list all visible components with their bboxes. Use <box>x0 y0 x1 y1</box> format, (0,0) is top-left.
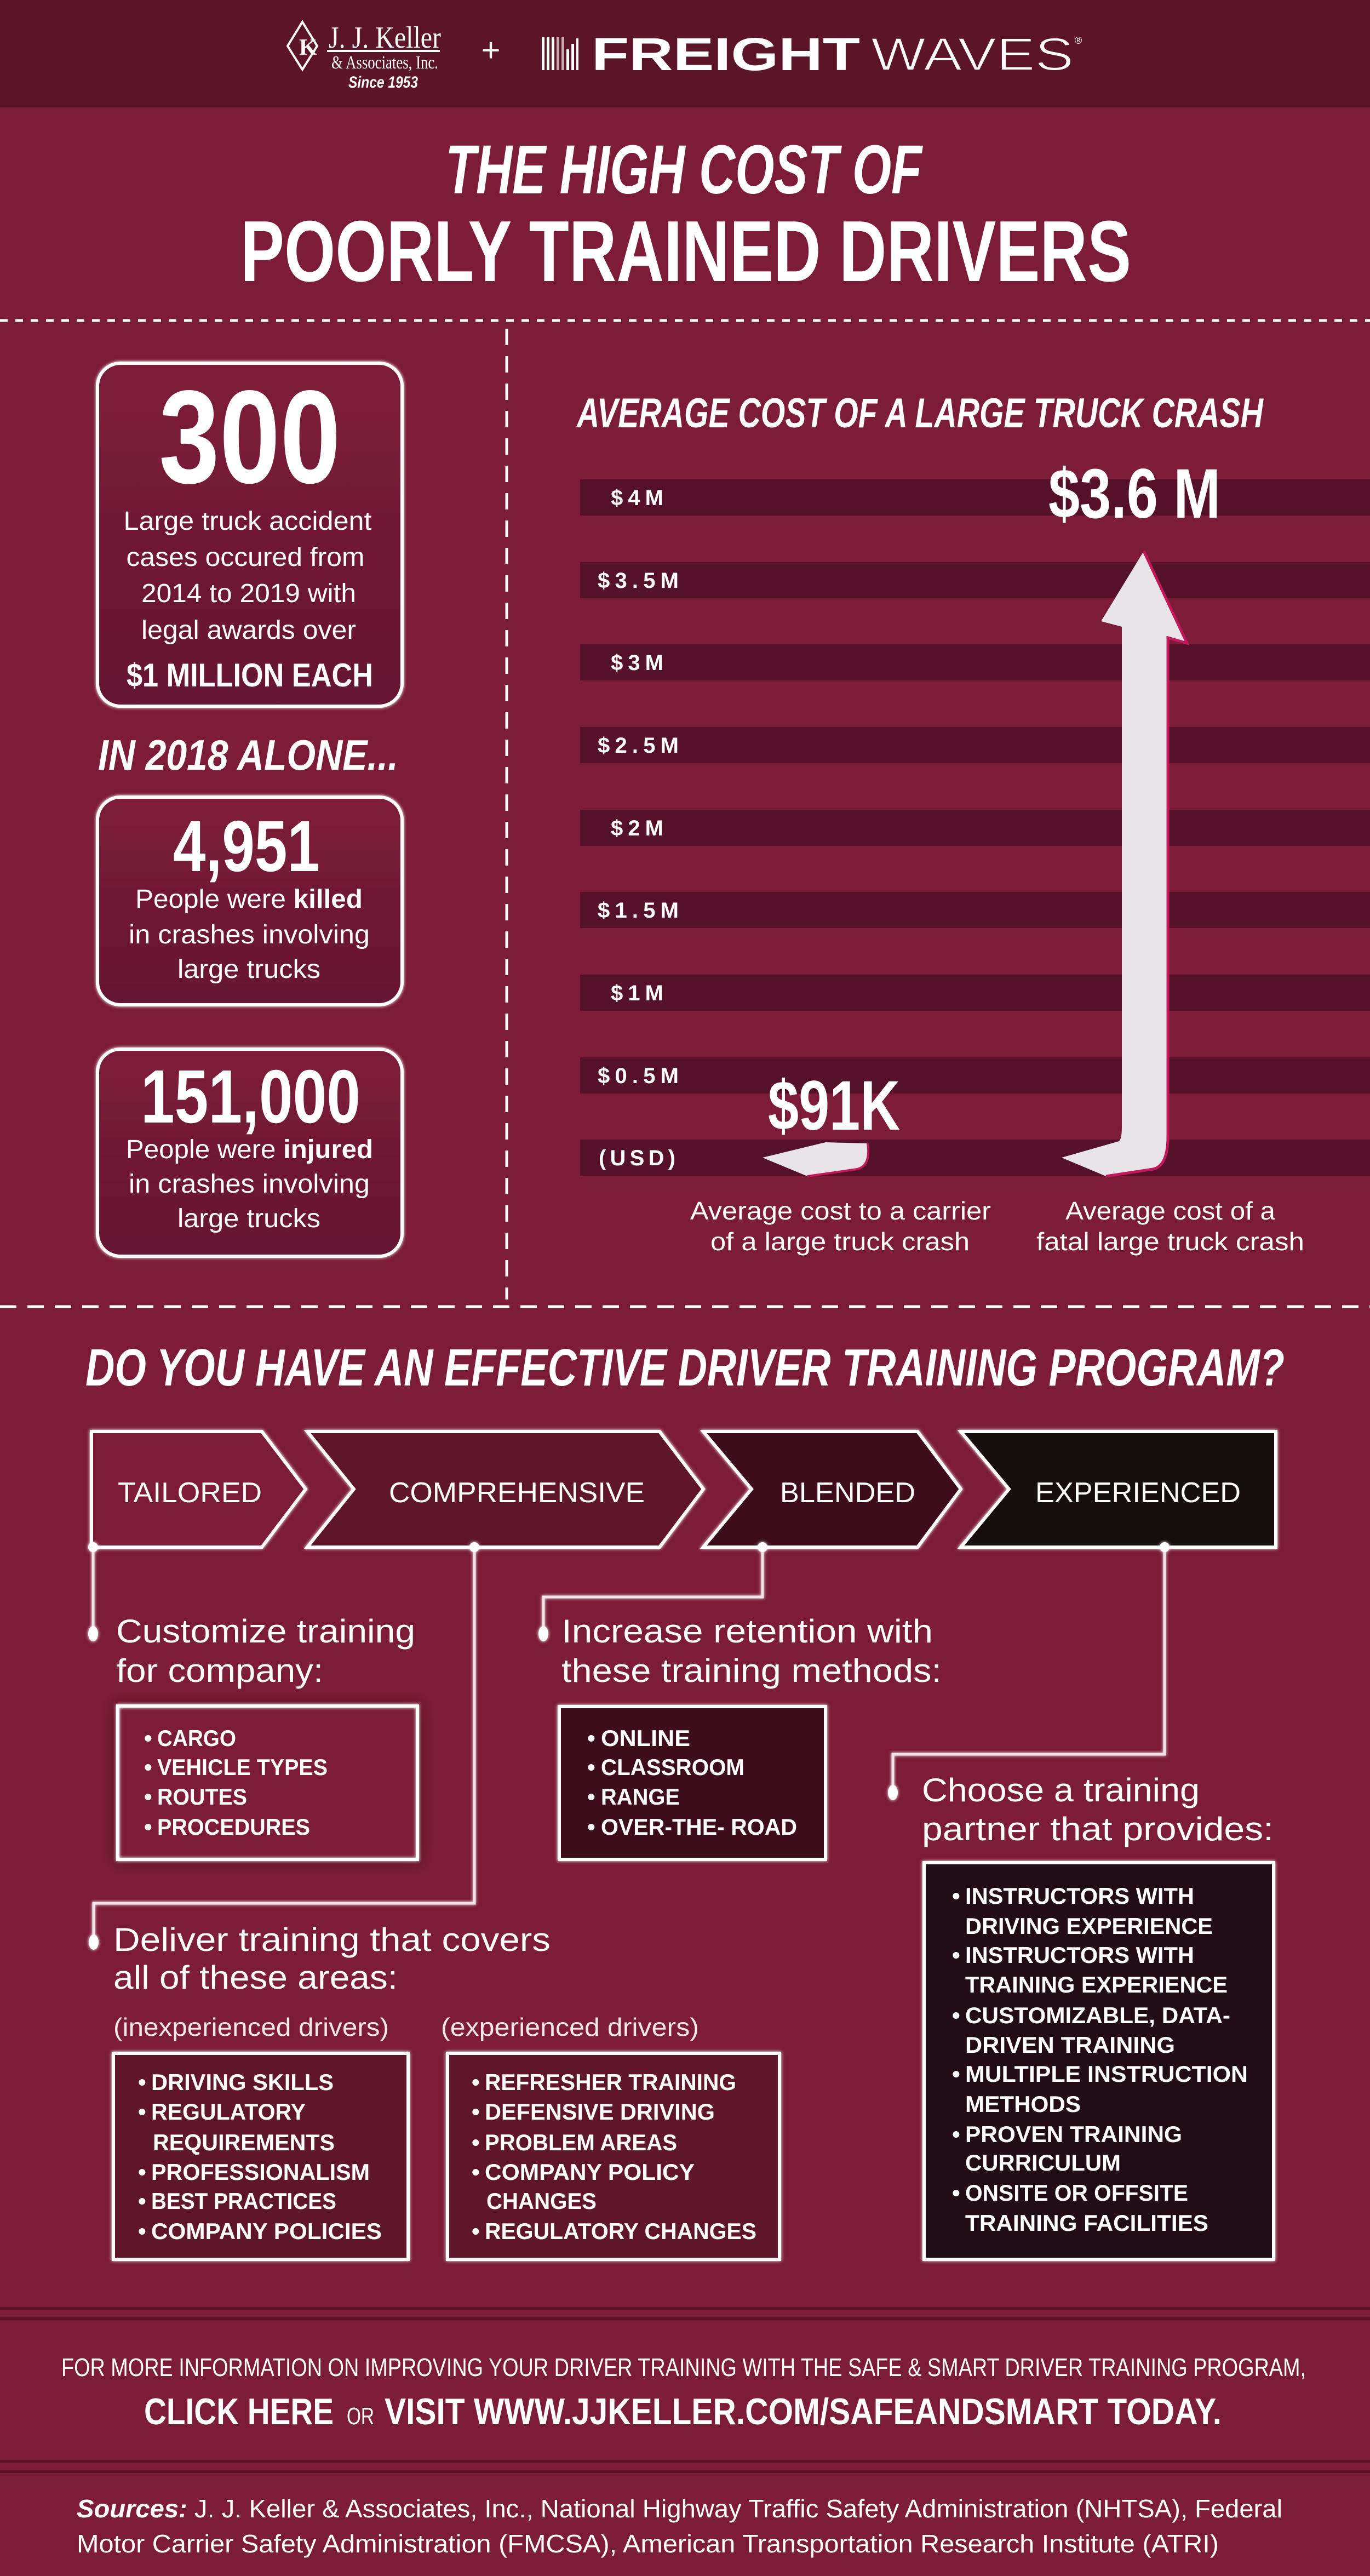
list box: customize: CARGO <box>157 1725 236 1751</box>
list box: training methods <box>559 1707 826 1859</box>
list box: training partner: • <box>952 1942 960 1968</box>
list box: training partner: TRAINING EXPERIENCE <box>965 1972 1228 1997</box>
text block: deliver training: Deliver training that covers <box>113 1921 551 1958</box>
chevron row <box>91 1432 1276 1547</box>
list box: training partner: INSTRUCTORS WITH <box>965 1883 1194 1909</box>
list box: training partner: CURRICULUM <box>965 2150 1121 2176</box>
call to action: CLICK HERE <box>144 2391 334 2432</box>
text block: increase retention: Increase retention with <box>561 1613 933 1650</box>
list box: customize: • <box>144 1725 152 1751</box>
panel: 4,951 killed: large trucks <box>177 955 320 984</box>
list box: inexperienced drivers: • <box>138 2069 146 2095</box>
list box: training methods: • <box>587 1784 595 1810</box>
list box: experienced drivers: CHANGES <box>486 2188 597 2214</box>
title <box>240 131 1131 300</box>
arrow: small $91K <box>763 1067 900 1176</box>
list box: customize: • <box>144 1754 152 1780</box>
panel: 151,000 injured <box>98 1049 402 1256</box>
list box: experienced drivers: • <box>472 2159 480 2185</box>
logo: J. J. Keller: K <box>299 35 317 60</box>
logo: J. J. Keller <box>288 21 441 91</box>
list box: inexperienced drivers: PROFESSIONALISM <box>151 2159 370 2185</box>
list box: training methods: CLASSROOM <box>601 1754 744 1780</box>
list box: inexperienced drivers: REGULATORY <box>151 2099 306 2125</box>
list box: experienced drivers: • <box>472 2218 480 2244</box>
subheadings: driver experience: (inexperienced drivers) <box>113 2013 389 2041</box>
list box: inexperienced drivers: REQUIREMENTS <box>153 2130 335 2155</box>
list box: training partner <box>924 1863 1274 2259</box>
panel: 151,000 injured: in crashes involving <box>129 1170 370 1199</box>
title: THE HIGH COST OF <box>445 131 923 208</box>
list box: customize: VEHICLE TYPES <box>157 1754 328 1780</box>
list box: customize: ROUTES <box>157 1784 247 1810</box>
connector lines <box>88 1542 1170 1950</box>
text block: customize training: for company: <box>116 1652 323 1689</box>
list box: inexperienced drivers: • <box>138 2159 146 2185</box>
heading: in 2018 alone: IN 2018 ALONE... <box>98 731 398 779</box>
chart: average cost bands: $3M <box>611 651 663 675</box>
list box: inexperienced drivers: • <box>138 2188 146 2214</box>
list box: training partner: • <box>952 2180 960 2206</box>
sources: Sources: J. J. Keller & Associates, Inc., National Highway Traffic Safety Administration (NHTSA), Federal <box>77 2494 1282 2523</box>
panel: 300 cases stat box: Large truck accident <box>124 507 371 536</box>
list box: customize: • <box>144 1814 152 1840</box>
chart: average cost bands: $1.5M <box>598 898 679 923</box>
subheadings: driver experience: (experienced drivers) <box>441 2013 699 2041</box>
list box: experienced drivers: REFRESHER TRAINING <box>485 2069 736 2095</box>
list box: customize <box>118 1706 417 1859</box>
chart: average cost bands: $0.5M <box>598 1064 679 1088</box>
list box: experienced drivers: • <box>472 2130 480 2155</box>
text block: customize training <box>116 1613 415 1689</box>
call to action <box>61 2353 1306 2432</box>
logo: FreightWaves: WAVES <box>871 28 1074 80</box>
text block: choose a partner: Choose a training <box>922 1772 1200 1808</box>
chevron row: TAILORED <box>118 1477 262 1509</box>
text block: increase retention <box>561 1613 942 1689</box>
list box: training partner: MULTIPLE INSTRUCTION <box>965 2061 1248 2087</box>
list box: experienced drivers: • <box>472 2099 480 2125</box>
list box: training methods: • <box>587 1725 595 1751</box>
list box: training partner: • <box>952 1883 960 1909</box>
list box: training partner: • <box>952 2121 960 2147</box>
list box: customize: • <box>144 1784 152 1810</box>
text block: choose a partner <box>922 1772 1274 1847</box>
sources: Motor Carrier Safety Administration (FMCSA), American Transportation Research Institute (ATRI) <box>77 2529 1219 2558</box>
logo: J. J. Keller: Since 1953 <box>348 73 418 91</box>
list box: inexperienced drivers: BEST PRACTICES <box>151 2188 336 2214</box>
list box: training methods: ONLINE <box>601 1725 690 1751</box>
chart: average cost bands: $2M <box>611 816 663 840</box>
chart: average cost bands: $2.5M <box>598 734 679 758</box>
chart labels: fatal large truck crash <box>1036 1227 1304 1256</box>
list box: customize: PROCEDURES <box>157 1814 310 1840</box>
list box: inexperienced drivers: • <box>138 2218 146 2244</box>
text block: increase retention: these training methods: <box>561 1652 942 1689</box>
subheadings: driver experience <box>113 2013 699 2041</box>
list box: training partner: DRIVEN TRAINING <box>965 2032 1175 2058</box>
chart labels: Average cost to a carrier <box>690 1197 991 1225</box>
list box: training partner: ONSITE OR OFFSITE <box>965 2180 1188 2206</box>
list box: training partner: INSTRUCTORS WITH <box>965 1942 1194 1968</box>
list box: inexperienced drivers: DRIVING SKILLS <box>151 2069 334 2095</box>
chevron row: COMPREHENSIVE <box>389 1477 645 1509</box>
call to action: VISIT WWW.JJKELLER.COM/SAFEANDSMART TODAY. <box>385 2391 1222 2432</box>
chart labels: of a large truck crash <box>710 1227 970 1256</box>
list box: inexperienced drivers <box>113 2053 408 2259</box>
list box: training methods: RANGE <box>601 1784 680 1810</box>
chart labels <box>690 1197 1304 1256</box>
list box: training partner: • <box>952 2002 960 2028</box>
text block: deliver training: all of these areas: <box>113 1959 398 1996</box>
list box: experienced drivers: COMPANY POLICY <box>485 2159 695 2185</box>
panel: 300 cases stat box: 2014 to 2019 with <box>141 579 356 608</box>
logo: J. J. Keller: J. J. Keller <box>329 21 441 55</box>
chevron row: EXPERIENCED <box>1035 1477 1241 1509</box>
panel: 4,951 killed: in crashes involving <box>129 920 370 949</box>
text block: customize training: Customize training <box>116 1613 415 1650</box>
list box: training methods: • <box>587 1814 595 1840</box>
plus sign: + <box>481 32 501 68</box>
list box: experienced drivers: • <box>472 2069 480 2095</box>
logo: J. J. Keller: & Associates, Inc. <box>331 53 438 73</box>
panel: 4,951 killed <box>98 797 402 1005</box>
arrow: big $3.6M: $3.6 M <box>1048 455 1220 533</box>
panel: 151,000 injured: large trucks <box>177 1204 320 1233</box>
list box: experienced drivers: PROBLEM AREAS <box>485 2130 677 2155</box>
panel: 151,000 injured: 151,000 <box>141 1055 360 1139</box>
panel: 300 cases stat box: $1 MILLION EACH <box>127 657 373 694</box>
chart: average cost bands: (USD) <box>599 1146 675 1170</box>
panel: 300 cases stat box: cases occured from <box>126 543 365 572</box>
chevron row: BLENDED <box>780 1477 915 1509</box>
list box: inexperienced drivers: COMPANY POLICIES <box>151 2218 382 2244</box>
chart: average cost bands: $1M <box>611 981 663 1005</box>
list box: experienced drivers <box>448 2053 779 2259</box>
logo: FreightWaves <box>542 28 1082 80</box>
chart labels: Average cost of a <box>1065 1197 1275 1225</box>
list box: training partner: PROVEN TRAINING <box>965 2121 1182 2147</box>
list box: experienced drivers: REGULATORY CHANGES <box>485 2218 756 2244</box>
panel: 300 cases stat box: 300 <box>159 363 341 511</box>
panel: 4,951 killed: 4,951 <box>173 806 320 886</box>
chart: average cost bands <box>580 479 1370 1176</box>
panel: 300 cases stat box: legal awards over <box>141 616 356 645</box>
text block: deliver training <box>113 1921 551 1996</box>
chart: average cost bands: $3.5M <box>598 569 679 593</box>
list box: training partner: METHODS <box>965 2091 1081 2117</box>
list box: training partner: CUSTOMIZABLE, DATA- <box>965 2002 1230 2028</box>
list box: experienced drivers: DEFENSIVE DRIVING <box>485 2099 715 2125</box>
chart: average cost bands: $4M <box>611 486 663 510</box>
list box: inexperienced drivers: • <box>138 2099 146 2125</box>
arrow: big $3.6M <box>1048 455 1220 1176</box>
logo: FreightWaves: ® <box>1075 35 1082 46</box>
panel: 300 cases stat box <box>98 363 402 706</box>
sources <box>77 2494 1282 2558</box>
list box: training partner: DRIVING EXPERIENCE <box>965 1913 1213 1939</box>
list box: training partner: TRAINING FACILITIES <box>965 2210 1208 2236</box>
arrow: small $91K: $91K <box>768 1067 900 1145</box>
list box: training methods: OVER-THE- ROAD <box>601 1814 797 1840</box>
panel: 4,951 killed: People were killed <box>135 885 363 914</box>
list box: training methods: • <box>587 1754 595 1780</box>
list box: training partner: • <box>952 2061 960 2087</box>
panel: 151,000 injured: People were injured <box>126 1135 373 1164</box>
call to action: OR <box>347 2403 374 2430</box>
logo: FreightWaves: FREIGHT <box>592 28 860 80</box>
header band <box>0 0 1370 107</box>
text block: choose a partner: partner that provides: <box>922 1811 1274 1847</box>
